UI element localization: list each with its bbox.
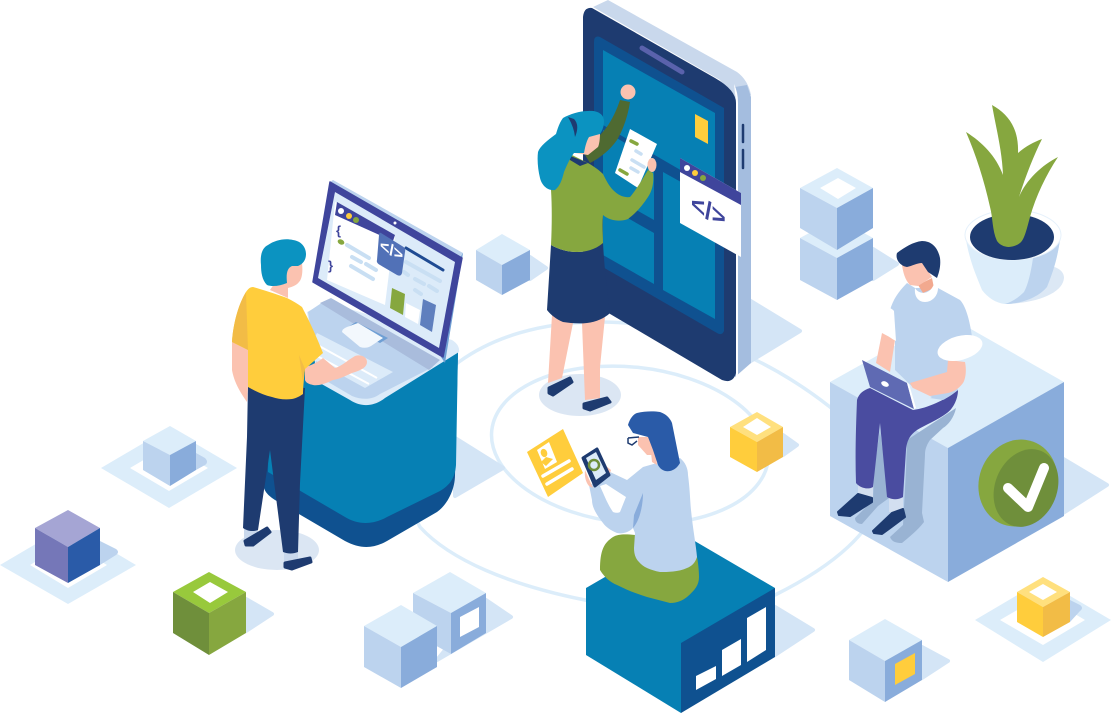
right side [735,85,751,377]
hair [628,411,680,471]
code badge [377,233,405,276]
person: man on box with laptop [838,241,985,543]
screen panels [603,50,715,190]
floor shadow [235,530,319,570]
laptop keyboard [907,384,932,408]
stacked cubes [800,168,873,300]
trousers [243,384,305,554]
tablet [583,0,751,381]
shoes [838,494,905,534]
floor shadows [246,249,1107,678]
code braces: { [336,223,341,238]
icon: check badge [966,428,1070,538]
hair band [568,117,577,137]
sweater [589,458,697,572]
socks [858,484,903,512]
person: woman at tablet [538,84,657,416]
leaves [966,105,1058,247]
skirt [547,242,610,323]
floor shadow [539,374,621,416]
screen chart bars [390,288,405,315]
face [902,262,932,286]
green cube [173,572,246,655]
side buttons [742,125,744,168]
sweater [551,153,653,252]
connecting rings [405,322,880,610]
code badge: </> [380,235,403,265]
shoes [549,378,610,410]
right sleeve [935,330,985,366]
floating code window: </> [691,187,726,234]
face [638,437,655,455]
right leg shadow [890,408,956,543]
cube with yellow window [849,619,922,702]
keyboard [305,333,393,388]
monitor: } [328,258,333,273]
small cube, centre top [476,234,530,295]
monitor foot shadow [320,298,440,370]
skirt [600,534,699,603]
platform: purple cube with tile [0,510,136,604]
monitor [313,180,463,363]
hair [261,239,306,286]
shirt [232,287,323,399]
front [583,8,736,381]
hands [585,466,611,488]
collar [568,155,588,166]
laptop [862,360,914,409]
trousers [856,388,958,499]
left arm [232,342,248,402]
phone [583,449,609,486]
arm gap [600,484,626,513]
code lines [347,245,376,279]
raised arm [585,100,630,163]
socks [244,526,298,564]
bar chart [696,607,766,690]
neck [651,452,657,465]
neck [918,278,934,293]
yellow cube with tile, right [975,577,1111,662]
navy header line [406,248,443,270]
raised hand [620,84,636,100]
face [575,133,600,155]
id card [527,429,583,497]
hair [538,111,604,190]
mouse pad [348,322,388,343]
bezel [594,37,724,334]
neck and face [270,263,302,298]
potted plant [965,105,1064,304]
data box with bars [586,533,775,713]
top edge [593,0,751,103]
collar [915,284,938,302]
legs [548,315,605,400]
sitting box with check [830,316,1070,582]
platform: cube with pale tile, left [101,426,237,508]
floating code window [680,158,741,257]
shoes [245,528,311,569]
left sleeve [875,307,896,341]
shirt [890,283,972,400]
right arm [305,355,367,385]
speaker [642,48,682,72]
person: woman with phone [583,411,699,603]
person: man in yellow shirt [232,239,367,570]
yellow cube, centre [730,412,783,472]
glasses [628,437,639,445]
hair [897,241,940,278]
desk top rim [307,302,459,405]
left leg shadow [855,430,889,524]
pale cubes pair [364,572,486,688]
left arm [876,333,895,372]
right arm [910,360,966,398]
desk top surface [308,302,433,399]
paper [615,129,657,188]
sleeve shadow [633,493,643,528]
desk [263,298,459,547]
hand on paper [648,158,656,172]
yellow note [695,114,708,144]
